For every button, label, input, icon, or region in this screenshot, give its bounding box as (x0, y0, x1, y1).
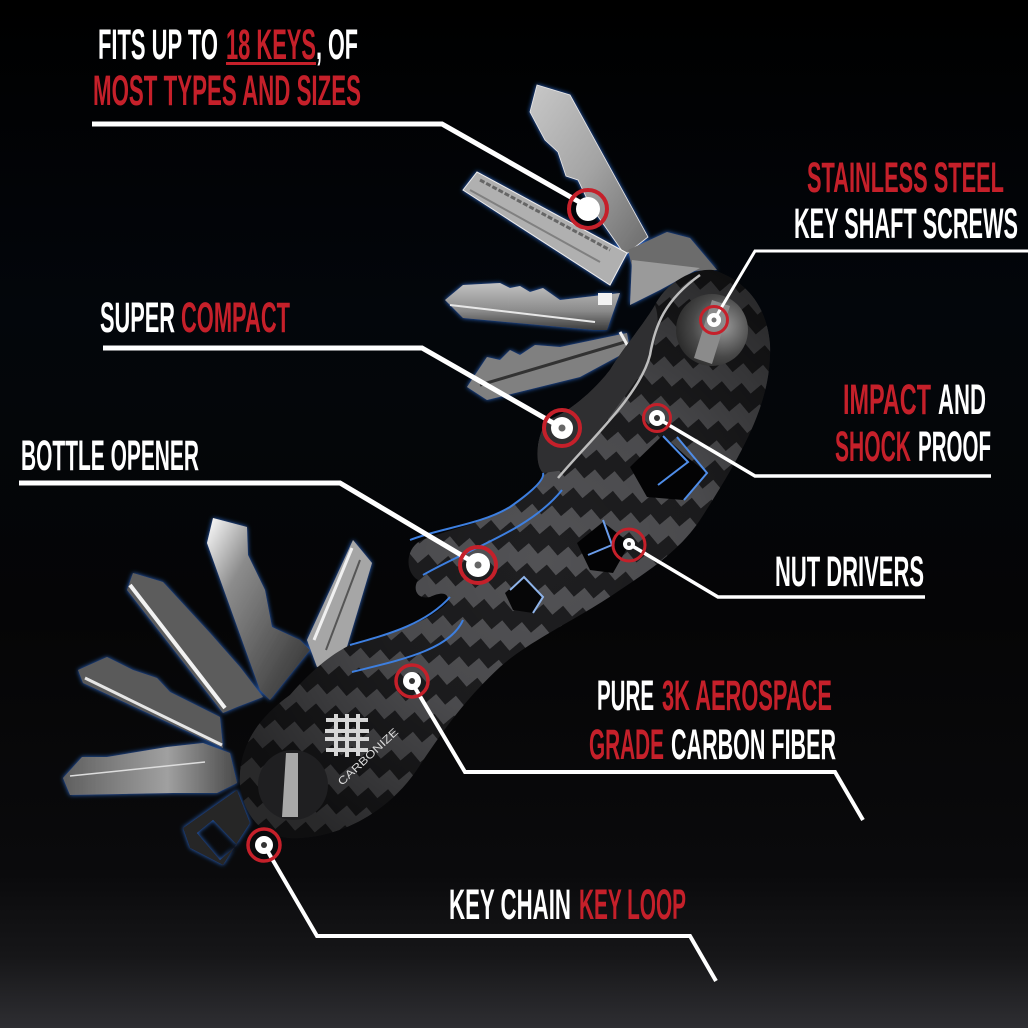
hex hole medium edge (588, 520, 612, 555)
opener slot edges (350, 473, 562, 672)
callout: 18 keys (92, 21, 607, 228)
heading (589, 672, 836, 769)
heading (794, 154, 1018, 248)
carbon fiber body (240, 270, 770, 838)
leader line (714, 251, 1028, 320)
body shading (240, 270, 770, 838)
heading: 3K AEROSPACE (662, 672, 832, 720)
callout: bottle opener: BOTTLE OPENER (21, 432, 199, 480)
heading: SHOCK (835, 423, 911, 471)
lower key group (63, 518, 372, 865)
hex hole medium (577, 522, 630, 573)
heading: SUPER (100, 294, 175, 342)
icon: key loop (183, 790, 250, 865)
heading: CARBON FIBER (671, 721, 836, 769)
heading: KEY CHAIN (449, 881, 571, 929)
leader line (264, 845, 716, 981)
callout: screws (700, 154, 1028, 334)
heading: IMPACT (843, 376, 931, 424)
heading (835, 376, 991, 471)
callout: bottle opener (19, 432, 496, 583)
leader line (657, 418, 991, 476)
heading: MOST TYPES AND SIZES (93, 67, 361, 115)
heading: GRADE (589, 721, 664, 769)
marker (544, 410, 580, 446)
hex hole large (630, 435, 707, 500)
brand name: CARBONIZE (336, 726, 401, 788)
leader line (103, 348, 562, 428)
callout: impact (644, 376, 991, 476)
marker (569, 190, 607, 228)
upper key group (445, 85, 717, 400)
upper arm plate (537, 305, 658, 473)
marker (644, 404, 670, 432)
marker (248, 829, 280, 861)
heading (93, 21, 361, 115)
callout: key loop: KEY LOOP (579, 881, 686, 929)
heading: 18 KEYS (226, 21, 316, 69)
marker (460, 547, 496, 583)
callout: carbon fiber (396, 665, 863, 820)
heading: COMPACT (181, 294, 290, 342)
upper screw (676, 294, 748, 366)
leader line (19, 483, 478, 565)
hex hole small edge (510, 577, 543, 613)
leader line (629, 544, 925, 597)
callout: nut drivers (613, 529, 925, 597)
marker (396, 665, 428, 697)
heading: PURE (597, 672, 654, 720)
leader line (411, 681, 863, 820)
marker (700, 306, 728, 334)
hex hole small (505, 577, 543, 613)
callout: compact (100, 294, 580, 446)
heading: , OF (316, 21, 358, 69)
leader line (92, 124, 590, 208)
logo mark (325, 714, 369, 757)
lower screw (258, 750, 328, 820)
heading: FITS UP TO (98, 21, 218, 69)
arm metal edge (558, 275, 700, 478)
key organizer product (63, 85, 770, 865)
marker (613, 529, 645, 561)
callout: key loop (248, 829, 716, 981)
hex hole large edge (658, 436, 707, 500)
